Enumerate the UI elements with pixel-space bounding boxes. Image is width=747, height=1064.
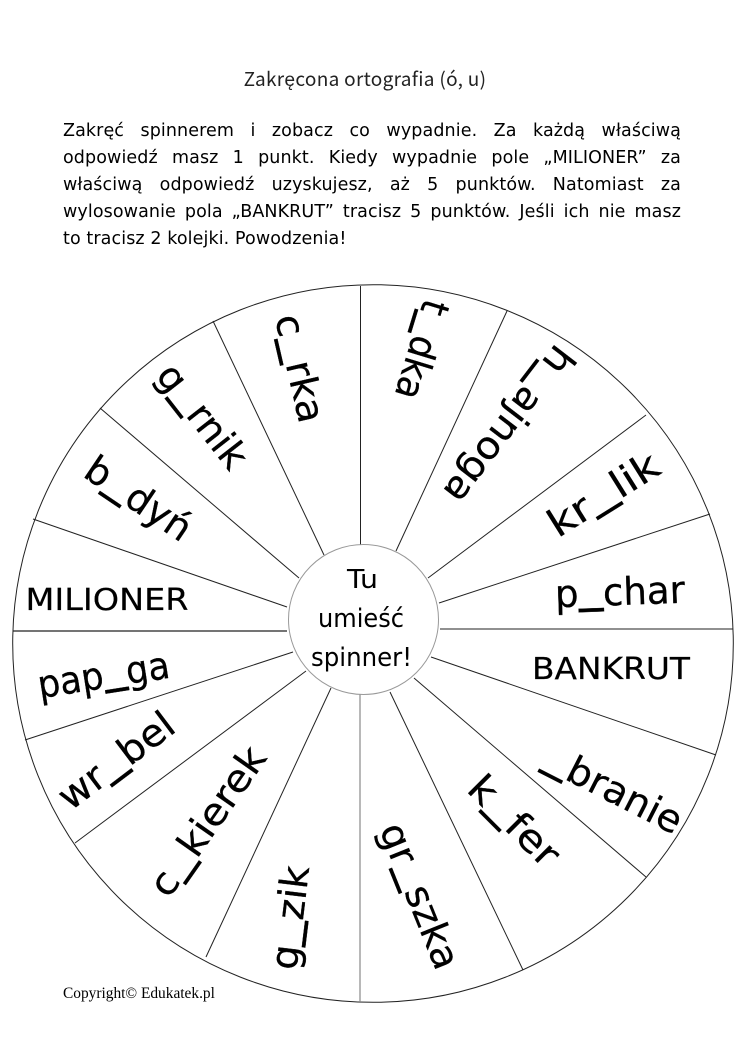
label: b_dyń: b (77, 447, 121, 497)
label: t_dka: dka (386, 330, 447, 405)
label: c_rka: c (266, 310, 314, 340)
label: b_dyń: dyń (117, 474, 201, 550)
label: gr_szka: _ (388, 847, 453, 895)
label: t_dka: _ (407, 308, 470, 349)
label: g_rnik: rnik (178, 394, 257, 478)
label: p_char: char (602, 568, 686, 615)
text block: instructions (63, 121, 681, 249)
label: p_char: p (554, 571, 580, 616)
label: p_char: _ (576, 554, 605, 612)
center hub: Tu (346, 565, 378, 595)
label: k_fer: _ (478, 770, 540, 833)
label: g_zik: g (262, 943, 308, 972)
label: h_ajnoga: h (534, 337, 584, 383)
label: gr_szka: gr (371, 816, 426, 870)
center hub: spinner! (311, 643, 412, 673)
copyright: Copyright© Edukatek.pl (63, 985, 215, 1002)
label: _branie: _ (537, 720, 588, 784)
label: pap_ga: _ (96, 633, 130, 694)
label: _branie: branie (559, 747, 690, 843)
label: MILIONER: MILIONER (26, 583, 188, 618)
label: c_rka: rka (277, 356, 334, 427)
label: pap_ga: pap (34, 653, 112, 707)
label: c_kierek: _ (138, 829, 202, 886)
label: k_fer: k (459, 766, 506, 812)
label: wr_bel: _ (77, 725, 134, 788)
text block: instructions: odpowiedź masz 1 punkt. Kiedy wypadnie pole „MILIONER” za (63, 148, 681, 168)
label: t_dka: t (411, 295, 458, 322)
label: h_ajnoga: ajnoga (435, 378, 552, 513)
label: k_fer: fer (496, 803, 570, 876)
label: g_zik: _ (248, 914, 309, 948)
title: Zakręcona ortografia (ó, u) (244, 65, 486, 92)
label: BANKRUT: BANKRUT (532, 652, 691, 687)
label: wr_bel: bel (109, 702, 183, 774)
center hub (288, 544, 438, 694)
label: g_rnik: g (147, 355, 197, 401)
label: kr_lik: lik (601, 443, 668, 507)
text block: instructions: wylosowanie pola „BANKRUT” tracisz 5 punktów. Jeśli ich nie masz (63, 202, 681, 222)
label: kr_lik: kr (539, 489, 594, 546)
label: h_ajnoga: _ (519, 358, 583, 416)
text block: instructions: właściwą odpowiedź uzyskujesz, aż 5 punktów. Natomiast za (63, 175, 681, 195)
center hub: umieść (318, 604, 404, 634)
text block: instructions: to tracisz 2 kolejki. Powodzenia! (63, 229, 346, 249)
label: g_zik: zik (268, 863, 318, 922)
text block: instructions: Zakręć spinnerem i zobacz co wypadnie. Za każdą właściwą (63, 121, 681, 141)
label: c_kierek: c (140, 862, 188, 905)
label: g_rnik: _ (164, 362, 227, 420)
label: wr_bel: wr (49, 756, 113, 819)
label: c_kierek: kierek (168, 738, 275, 865)
label: c_rka: _ (274, 326, 336, 366)
label: b_dyń: _ (98, 446, 152, 509)
label: gr_szka: szka (396, 878, 469, 976)
label: kr_lik: _ (567, 455, 624, 521)
label: pap_ga: ga (122, 643, 173, 693)
